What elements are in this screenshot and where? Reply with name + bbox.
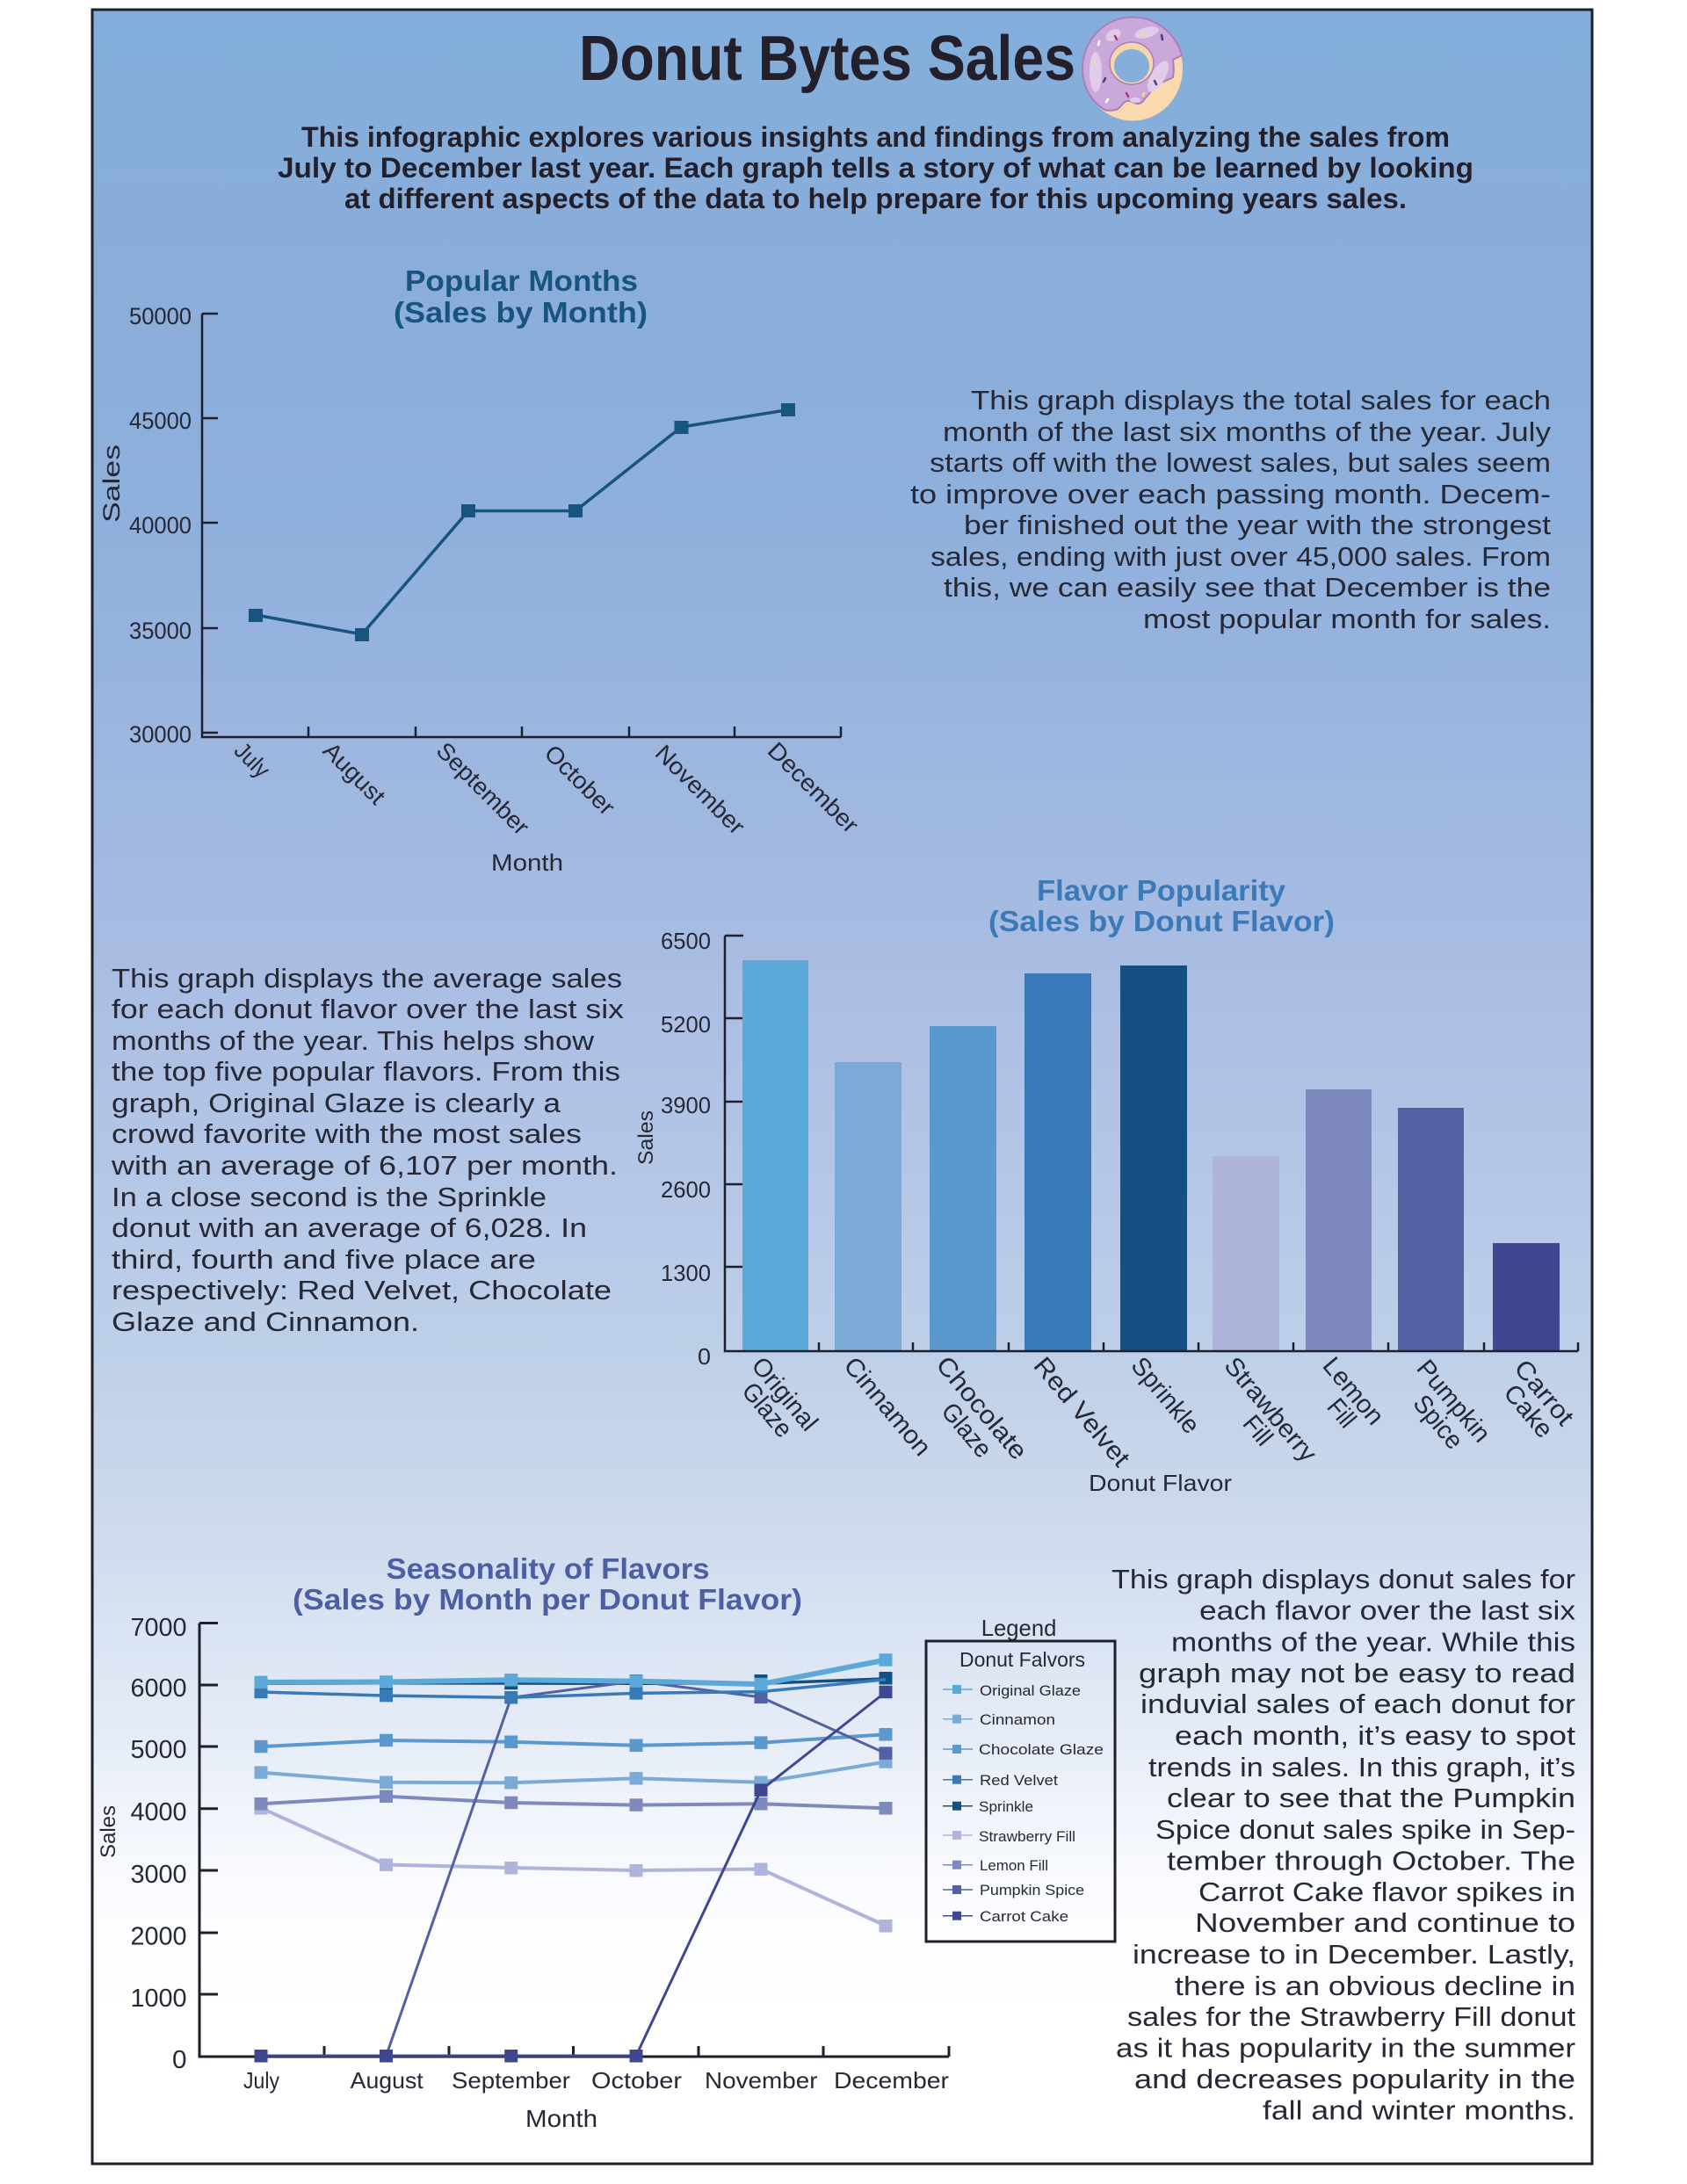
x axis tick labels (229, 737, 864, 840)
text block: flavor popularity description: This graph displays the average sales (112, 963, 622, 994)
series: chocolate glaze (255, 1728, 893, 1753)
text block: popular months description: most popular month for sales. (1143, 604, 1551, 634)
text block: flavor popularity description: In a close second is the Sprinkle (112, 1182, 547, 1212)
legend item: chocolate glaze: Chocolate Glaze (979, 1741, 1104, 1758)
text block: popular months description: starts off with the lowest sales, but sales seem (930, 447, 1551, 478)
text block: seasonality description: graph may not be easy to read (1139, 1658, 1575, 1689)
y axis tick labels: 50000 (129, 303, 192, 329)
y axis tick labels (130, 1614, 186, 2074)
text block: seasonality description: sales for the Strawberry Fill donut (1127, 2001, 1575, 2032)
x axis tick labels: September (452, 2067, 570, 2094)
panel: flavor popularity bar chart (634, 874, 1579, 1496)
y axis label: Sales (634, 1110, 658, 1165)
text block: seasonality description: trends in sales. In this graph, it’s (1148, 1752, 1575, 1783)
heading: seasonality of flavors: Seasonality of Flavors (387, 1552, 710, 1585)
intro text: This infographic explores various insights and findings from analyzing the sales from (301, 121, 1450, 153)
y axis tick labels (661, 928, 711, 1370)
x axis tick labels: July (243, 2067, 279, 2094)
x axis tick labels: December (834, 2067, 949, 2094)
chart axes (202, 314, 841, 737)
x axis tick labels: Glaze (936, 1398, 997, 1464)
text block: flavor popularity description: respectively: Red Velvet, Chocolate (112, 1275, 612, 1305)
legend item: original glaze: Original Glaze (980, 1682, 1081, 1699)
text block: flavor popularity description: third, fourth and five place are (112, 1244, 536, 1275)
legend item: lemon fill: Lemon Fill (980, 1857, 1048, 1874)
legend item: carrot cake (943, 1908, 1068, 1925)
series: carrot cake (255, 1686, 893, 2063)
x axis tick labels: October (539, 740, 620, 821)
y axis tick labels: 40000 (129, 512, 192, 539)
text block: popular months description: this, we can easily see that December is the (944, 572, 1551, 603)
x axis label: Month (491, 850, 563, 876)
text block: seasonality description: there is an obvious decline in (1175, 1971, 1575, 2001)
panel: popular months line chart (98, 264, 864, 876)
legend item: strawberry fill: Strawberry Fill (979, 1828, 1075, 1845)
series: lemon fill (255, 1790, 893, 1815)
x axis tick labels: August (318, 737, 391, 810)
text block: flavor popularity description: the top five popular flavors. From this (112, 1056, 620, 1087)
y axis tick labels: 2000 (130, 1922, 186, 1950)
text block: seasonality description: each flavor over the last six (1199, 1595, 1576, 1626)
text block: flavor popularity description: graph, Original Glaze is clearly a (112, 1088, 561, 1118)
legend item: chocolate glaze (943, 1741, 1104, 1758)
x axis tick labels: Carrot (1509, 1355, 1579, 1431)
y axis tick labels: 30000 (129, 721, 192, 748)
text block: seasonality description: This graph displays donut sales for (1111, 1564, 1575, 1595)
x axis tick labels: Cinnamon (838, 1352, 937, 1462)
bars (742, 960, 1560, 1351)
legend (926, 1615, 1115, 1942)
y axis tick labels: 0 (172, 2046, 186, 2074)
text block: popular months description: This graph displays the total sales for each (971, 385, 1551, 416)
heading: popular months (394, 264, 648, 329)
chart axes (199, 1624, 949, 2057)
chart axes (725, 936, 1578, 1351)
x axis tick labels: November (705, 2067, 818, 2094)
heading: popular months: Popular Months (405, 264, 638, 297)
x axis label: Month (525, 2105, 597, 2132)
text block: seasonality description: months of the year. While this (1171, 1626, 1575, 1657)
icon: donut (1082, 16, 1183, 121)
text block: seasonality description (1111, 1564, 1576, 2126)
text block: flavor popularity description: Glaze and Cinnamon. (112, 1306, 419, 1337)
text block: popular months description (910, 385, 1552, 634)
text block: popular months description: month of the last six months of the year. July (943, 416, 1552, 447)
y axis tick labels: 7000 (130, 1614, 186, 1642)
text block: seasonality description: November and continue to (1195, 1907, 1575, 1938)
y axis tick labels: 1300 (661, 1260, 711, 1286)
text block: popular months description: sales, ending with just over 45,000 sales. From (930, 541, 1551, 572)
x axis tick labels: Original (746, 1352, 823, 1436)
text block: popular months description: to improve over each passing month. Decem- (910, 479, 1551, 510)
x axis tick labels: October (591, 2067, 682, 2094)
panel: seasonality line chart (97, 1552, 949, 2132)
text block: seasonality description: induvial sales of each donut for (1140, 1689, 1575, 1719)
series: strawberry fill (255, 1802, 893, 1933)
legend item: lemon fill (943, 1857, 1048, 1874)
heading: flavor popularity (988, 874, 1335, 937)
text block: seasonality description: fall and winter months. (1263, 2095, 1575, 2126)
text block: flavor popularity description: months of the year. This helps show (112, 1025, 595, 1056)
y axis label: Sales (98, 445, 125, 523)
x axis tick labels: Red Velvet (1028, 1352, 1135, 1472)
legend item: original glaze (943, 1682, 1081, 1699)
legend item: red velvet: Red Velvet (980, 1772, 1058, 1789)
y axis tick labels: 35000 (129, 618, 192, 644)
y axis tick labels: 1000 (130, 1985, 186, 2013)
x axis tick labels: Cake (1498, 1379, 1559, 1443)
text block: flavor popularity description: donut with an average of 6,028. In (112, 1212, 587, 1243)
x axis tick labels: Strawberry (1219, 1352, 1322, 1468)
x axis tick labels: Fill (1237, 1410, 1278, 1451)
intro text (278, 121, 1473, 214)
series: original glaze (255, 1653, 893, 1690)
x axis tick labels: July (229, 737, 275, 784)
text block: seasonality description: as it has popularity in the summer (1116, 2033, 1575, 2063)
legend item: sprinkle (943, 1798, 1033, 1815)
text block: flavor popularity description: crowd favorite with the most sales (112, 1118, 582, 1149)
y axis tick labels (129, 303, 192, 748)
text block: seasonality description: Spice donut sales spike in Sep- (1155, 1814, 1575, 1845)
title: Donut Bytes Sales (579, 24, 1075, 94)
text block: popular months description: ber finished out the year with the strongest (964, 510, 1551, 540)
text block: flavor popularity description: with an average of 6,107 per month. (111, 1150, 618, 1181)
text block: seasonality description: and decreases popularity in the (1134, 2064, 1575, 2094)
y axis tick labels: 6000 (130, 1674, 186, 1703)
x axis tick labels: Chocolate (930, 1351, 1032, 1465)
y axis label: Sales (97, 1805, 120, 1858)
y axis tick labels: 3000 (130, 1861, 186, 1889)
legend item: red velvet (943, 1772, 1058, 1789)
text block: flavor popularity description: for each donut flavor over the last six (112, 994, 625, 1024)
x axis tick labels: Lemon (1317, 1352, 1389, 1430)
x axis tick labels: September (431, 737, 534, 840)
y axis tick labels: 5200 (661, 1011, 711, 1038)
x axis tick labels (243, 2067, 949, 2094)
legend item: cinnamon (943, 1711, 1055, 1728)
x axis tick labels: Sprinkle (1126, 1352, 1205, 1439)
heading: popular months: (Sales by Month) (394, 296, 648, 329)
text block: seasonality description: clear to see that the Pumpkin (1167, 1783, 1575, 1813)
text block: flavor popularity description (111, 963, 625, 1337)
series: red velvet (255, 1680, 886, 1704)
heading: seasonality of flavors: (Sales by Month per Donut Flavor) (293, 1583, 802, 1616)
y axis tick labels: 4000 (130, 1798, 186, 1826)
y axis tick labels: 3900 (661, 1092, 711, 1118)
text block: seasonality description: increase to in December. Lastly, (1133, 1939, 1575, 1970)
text block: seasonality description: each month, it’s easy to spot (1175, 1720, 1575, 1751)
y axis tick labels: 2600 (661, 1176, 711, 1203)
legend item: cinnamon: Cinnamon (980, 1711, 1055, 1728)
heading: flavor popularity: (Sales by Donut Flavor) (988, 905, 1335, 937)
x axis tick labels: Fill (1321, 1393, 1361, 1434)
series: sprinkle (255, 1672, 893, 1690)
legend: Legend (981, 1615, 1056, 1641)
x axis tick labels: December (763, 737, 864, 838)
series: pumpkin spice (261, 1681, 893, 2056)
legend item: pumpkin spice: Pumpkin Spice (980, 1882, 1084, 1898)
y axis tick labels: 0 (698, 1343, 711, 1370)
legend item: carrot cake: Carrot Cake (980, 1908, 1068, 1925)
x axis tick labels: Spice (1408, 1390, 1468, 1455)
intro text: July to December last year. Each graph tells a story of what can be learned by looking (278, 152, 1473, 184)
series: cinnamon (255, 1755, 893, 1789)
x axis tick labels (736, 1351, 1579, 1472)
text block: seasonality description: tember through October. The (1167, 1846, 1575, 1877)
x axis label: Donut Flavor (1089, 1470, 1232, 1496)
x axis tick labels: August (351, 2067, 424, 2094)
heading: flavor popularity: Flavor Popularity (1037, 874, 1286, 907)
y axis tick labels: 5000 (130, 1736, 186, 1764)
data line (249, 403, 795, 641)
x axis tick labels: November (650, 740, 750, 840)
heading: seasonality of flavors (293, 1552, 802, 1616)
y axis tick labels: 6500 (661, 928, 711, 954)
legend item: sprinkle: Sprinkle (979, 1798, 1033, 1815)
text block: seasonality description: Carrot Cake flavor spikes in (1198, 1877, 1575, 1907)
x axis tick labels: Pumpkin (1411, 1355, 1495, 1448)
legend: Donut Falvors (959, 1648, 1085, 1671)
intro text: at different aspects of the data to help prepare for this upcoming years sales. (344, 183, 1407, 214)
x axis tick labels: Glaze (736, 1378, 798, 1443)
y axis tick labels: 45000 (129, 408, 192, 434)
